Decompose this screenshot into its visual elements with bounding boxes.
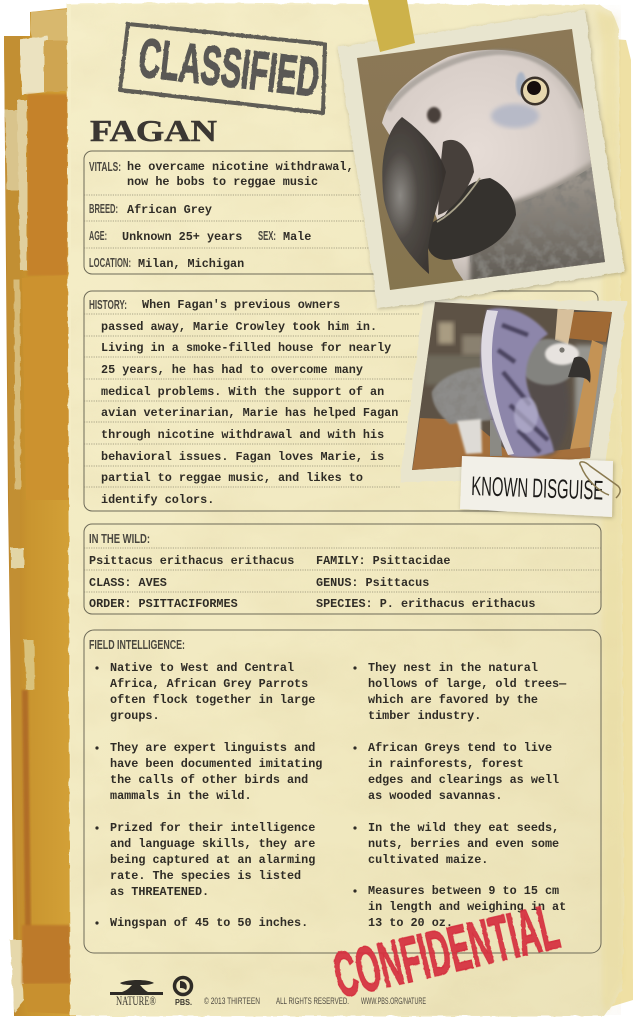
footer: logos and credits: © 2013 THIRTEEN [204, 996, 260, 1006]
panel: field intelligence [84, 630, 601, 953]
left column facts: and language skills, they are [110, 837, 315, 851]
panel: in the wild: CLASS: AVES [89, 576, 167, 590]
panel: in the wild: SPECIES: P. erithacus erithacus [316, 597, 535, 611]
right column facts: timber industry. [368, 709, 481, 723]
panel: in the wild: IN THE WILD: [89, 532, 150, 546]
panel: history: identify colors. [101, 493, 214, 507]
panel: vitals: he overcame nicotine withdrawal, [127, 160, 354, 174]
name heading: FAGAN [90, 113, 217, 148]
right column facts: In the wild they eat seeds, [368, 821, 559, 835]
right column facts: African Greys tend to live [368, 741, 552, 755]
upper beak [382, 117, 446, 274]
panel: vitals: AGE: [89, 229, 107, 243]
panel: history: partial to reggae music, and likes to [101, 471, 363, 485]
panel: in the wild: Psittacus erithacus erithacus [89, 554, 294, 568]
panel: vitals: Milan, Michigan [138, 257, 244, 271]
folder: aged mustard backing [4, 8, 76, 1016]
right column facts: 13 to 20 oz. [368, 916, 453, 930]
parrot face and beak [545, 343, 579, 365]
caption: known disguise note with paper clip [460, 456, 620, 517]
right column facts: cultivated maize. [368, 853, 488, 867]
left column facts: Wingspan of 45 to 50 inches. [110, 916, 308, 930]
panel: field intelligence: FIELD INTELLIGENCE: [89, 638, 185, 652]
panel: vitals: BREED: [89, 202, 118, 216]
panel: in the wild: ORDER: PSITTACIFORMES [89, 597, 238, 611]
panel: history: When Fagan's previous owners [142, 298, 340, 312]
left column facts [95, 661, 322, 930]
right column facts: They nest in the natural [368, 661, 538, 675]
left column facts: groups. [110, 709, 160, 723]
left column facts: often flock together in large [110, 693, 315, 707]
rear sheet right edge [600, 38, 633, 1010]
panel: vitals: Unknown 25+ years [122, 230, 242, 244]
panel: vitals: VITALS: [89, 160, 121, 174]
panel: history: avian veterinarian, Marie has helped Fagan [101, 406, 398, 420]
nature logo [110, 980, 163, 1008]
panel: in the wild: GENUS: Psittacus [316, 576, 429, 590]
panel: history: passed away, Marie Crowley took him in. [101, 320, 377, 334]
left column facts: Africa, African Grey Parrots [110, 677, 308, 691]
left column facts: Native to West and Central [110, 661, 294, 675]
pbs logo: PBS. [175, 998, 192, 1007]
panel: history: HISTORY: [89, 298, 127, 312]
parrot body [432, 367, 492, 424]
panel: vitals: SEX: [258, 229, 276, 243]
parrot head [525, 338, 573, 386]
panel: history: through nicotine withdrawal and with his [101, 428, 384, 442]
lower beak [427, 178, 516, 260]
panel: history: behavioral issues. Fagan loves Marie, is [101, 450, 384, 464]
right column facts: in rainforests, forest [368, 757, 524, 771]
panel: vitals: Male [283, 230, 311, 244]
right column facts: hollows of large, old trees— [368, 677, 567, 691]
photo: parrot close-up [338, 10, 625, 309]
left column facts: have been documented imitating [110, 757, 322, 771]
left column facts: They are expert linguists and [110, 741, 315, 755]
nature logo: NATURE® [116, 993, 156, 1008]
pbs logo [174, 978, 192, 1007]
footer: logos and credits: ALL RIGHTS RESERVED. [276, 996, 349, 1006]
left column facts: as THREATENED. [110, 885, 209, 899]
right column facts: which are favored by the [368, 693, 538, 707]
right column facts: edges and clearings as well [368, 773, 559, 787]
footer: logos and credits [110, 978, 426, 1008]
right column facts: in length and weighing in at [368, 900, 566, 914]
panel: vitals [84, 151, 504, 274]
head and neck [382, 50, 606, 290]
nostril [427, 107, 441, 123]
panel: in the wild: FAMILY: Psittacidae [316, 554, 451, 568]
panel: vitals: African Grey [127, 203, 212, 217]
panel: history: medical problems. With the support of an [101, 385, 384, 399]
stamp: classified: CLASSIFIED [136, 26, 322, 108]
right column facts: Measures between 9 to 15 cm [368, 884, 559, 898]
stamp: classified [120, 24, 325, 113]
panel: in the wild [84, 524, 601, 614]
ruffled collar [481, 308, 554, 458]
left column facts: Prized for their intelligence [110, 821, 315, 835]
panel: vitals: LOCATION: [89, 256, 131, 270]
right column facts [353, 661, 567, 930]
panel: history [84, 291, 598, 511]
left column facts: the calls of other birds and [110, 773, 308, 787]
panel: vitals: now he bobs to reggae music [127, 175, 318, 189]
panel: history: Living in a smoke-filled house for nearly [101, 341, 391, 355]
left column facts: rate. The species is listed [110, 869, 301, 883]
footer: logos and credits: WWW.PBS.ORG/NATURE [361, 996, 426, 1006]
photo: disguised parrot in ruffled collar [400, 295, 627, 482]
left column facts: being captured at an alarming [110, 853, 315, 867]
eye [520, 76, 550, 106]
right column facts: as wooded savannas. [368, 789, 503, 803]
right column facts: nuts, berries and even some [368, 837, 559, 851]
left column facts: mammals in the wild. [110, 789, 252, 803]
paper clip [580, 462, 620, 498]
tape strip [368, 0, 415, 52]
panel: history: 25 years, he has had to overcome many [101, 363, 363, 377]
